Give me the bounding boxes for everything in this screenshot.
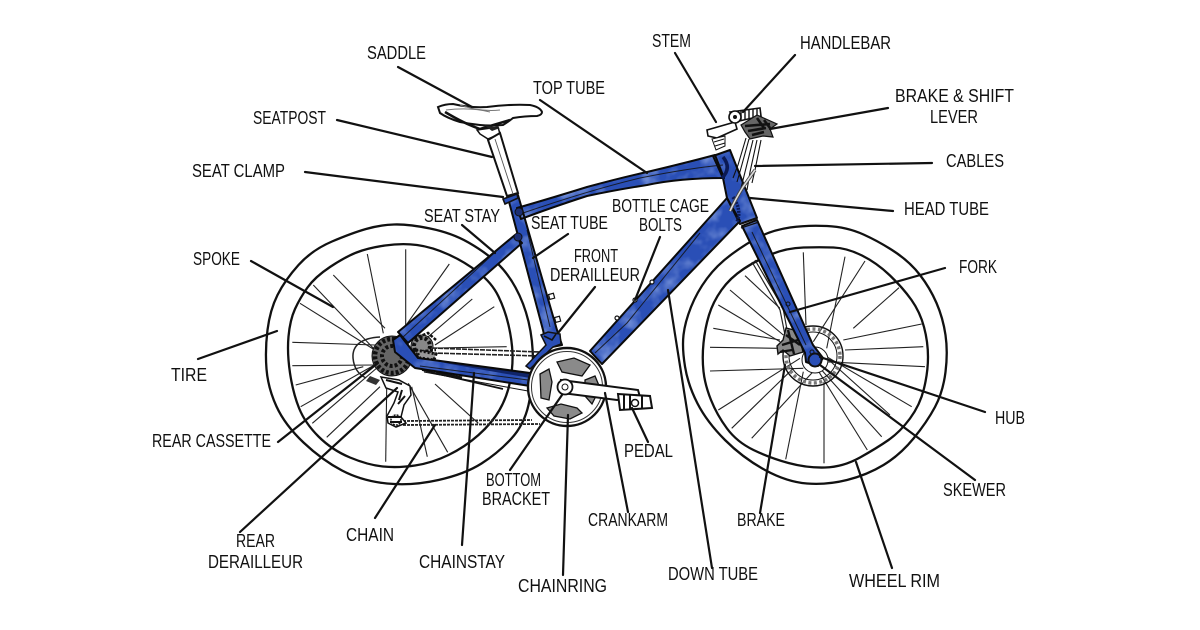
- callout: seat tube: SEAT TUBE: [531, 213, 608, 233]
- callout: rear cassette: [152, 363, 378, 451]
- callout: fork: FORK: [959, 257, 997, 277]
- callout: bottle cage bolts: BOLTS: [639, 215, 682, 235]
- callout: head tube: HEAD TUBE: [904, 199, 989, 219]
- rear wheel: [266, 224, 533, 484]
- callout: spoke: SPOKE: [193, 249, 240, 269]
- rear derailleur: [366, 376, 411, 427]
- frame joints: [514, 157, 814, 354]
- rear wheel spokes: [292, 249, 507, 462]
- front rim: [703, 247, 928, 468]
- callout: seat clamp: SEAT CLAMP: [192, 161, 285, 181]
- frame blue paint: [394, 151, 818, 384]
- callout: chainstay: CHAINSTAY: [419, 552, 505, 572]
- rear brake cable loop: [353, 337, 380, 378]
- brake caliper: [777, 328, 803, 356]
- callout: down tube: [668, 290, 758, 584]
- crankset: [528, 348, 652, 426]
- callout: seat stay: SEAT STAY: [424, 206, 500, 226]
- cables: [730, 138, 761, 211]
- callout: chainring: [518, 415, 607, 596]
- callout: wheel rim: WHEEL RIM: [849, 571, 940, 591]
- callout: brake and shift lever: LEVER: [930, 107, 978, 127]
- callout: seat clamp: [192, 161, 503, 197]
- rear cassette: [372, 333, 436, 376]
- callout: hub: [820, 357, 1025, 428]
- callout: front derailleur: DERAILLEUR: [550, 265, 640, 285]
- callout: seatpost: SEATPOST: [253, 108, 326, 128]
- callout: rear cassette: REAR CASSETTE: [152, 431, 271, 451]
- front tire: [683, 226, 947, 484]
- callout: skewer: [820, 365, 1006, 500]
- front hub: [808, 354, 822, 366]
- callout: seat stay: [424, 206, 500, 253]
- callout: handlebar: [743, 33, 891, 112]
- front wheel spokes: [710, 252, 925, 463]
- cable stops and bottle bolts: [549, 280, 654, 322]
- callout: pedal: [624, 408, 673, 461]
- callout: rear derailleur: [208, 388, 397, 572]
- rear rim: [288, 244, 513, 467]
- callout: hub: HUB: [995, 408, 1025, 428]
- callout: brake: BRAKE: [737, 510, 785, 530]
- callout: crankarm: CRANKARM: [588, 510, 668, 530]
- front wheel: [683, 226, 947, 484]
- callout: top tube: [533, 78, 647, 173]
- callout: brake: [737, 365, 785, 530]
- callout: cables: [755, 151, 1004, 171]
- callout: cables: CABLES: [946, 151, 1004, 171]
- callout: pedal: PEDAL: [624, 441, 673, 461]
- seat clamp: [503, 194, 518, 204]
- handlebar and brake levers: [729, 108, 777, 139]
- callout: rear derailleur: DERAILLEUR: [208, 552, 303, 572]
- callout: wheel rim: [849, 462, 940, 591]
- crank arm: [561, 380, 640, 400]
- callout: top tube: TOP TUBE: [533, 78, 605, 98]
- pedal: [618, 394, 652, 410]
- callout: skewer: SKEWER: [943, 480, 1006, 500]
- chainring: [528, 348, 606, 426]
- chain: [403, 348, 540, 425]
- callout: bottom bracket: BOTTOM: [486, 470, 541, 490]
- callout: chainring: CHAINRING: [518, 576, 607, 596]
- callout: stem: STEM: [652, 31, 691, 51]
- callout: head tube: [750, 198, 989, 219]
- callout: bottle cage bolts: BOTTLE CAGE: [612, 196, 709, 216]
- tube centre lines: [402, 165, 806, 380]
- callout: stem: [652, 31, 716, 122]
- callout: front derailleur: FRONT: [574, 246, 618, 266]
- callout: rear derailleur: REAR: [236, 531, 275, 551]
- callout: tire: TIRE: [171, 365, 207, 385]
- rear tire: [266, 224, 533, 484]
- callout: saddle: [367, 43, 472, 107]
- callout: spoke: [193, 249, 333, 307]
- callout: brake and shift lever: [770, 86, 1014, 129]
- callout: fork: [790, 257, 997, 312]
- disc brake rotor: [783, 326, 843, 386]
- seatpost: [488, 133, 518, 196]
- callout: chainstay: [419, 373, 505, 572]
- callout: down tube: DOWN TUBE: [668, 564, 758, 584]
- callout: saddle: SADDLE: [367, 43, 426, 63]
- chainstay lower shadow: [422, 370, 528, 391]
- callout: brake and shift lever: BRAKE & SHIFT: [895, 86, 1014, 106]
- callout: chain: CHAIN: [346, 525, 394, 545]
- callout: handlebar: HANDLEBAR: [800, 33, 891, 53]
- chainring windows: [540, 358, 600, 419]
- callout: seatpost: [253, 108, 492, 157]
- brake hose along fork: [752, 260, 788, 335]
- frame: [392, 149, 824, 386]
- stem: [707, 122, 737, 150]
- callout: bottom bracket: [482, 395, 562, 509]
- callout: bottle cage bolts: [612, 196, 709, 300]
- callout: tire: [171, 331, 277, 385]
- saddle clamp: [477, 127, 500, 139]
- front derailleur: [526, 332, 561, 369]
- callout: front derailleur: [550, 246, 640, 333]
- saddle: [438, 104, 542, 139]
- callout: bottom bracket: BRACKET: [482, 489, 550, 509]
- callout: crankarm: [588, 393, 668, 530]
- frame outlines: [398, 235, 522, 343]
- callout: seat tube: [531, 213, 608, 258]
- callout: chain: [346, 425, 435, 545]
